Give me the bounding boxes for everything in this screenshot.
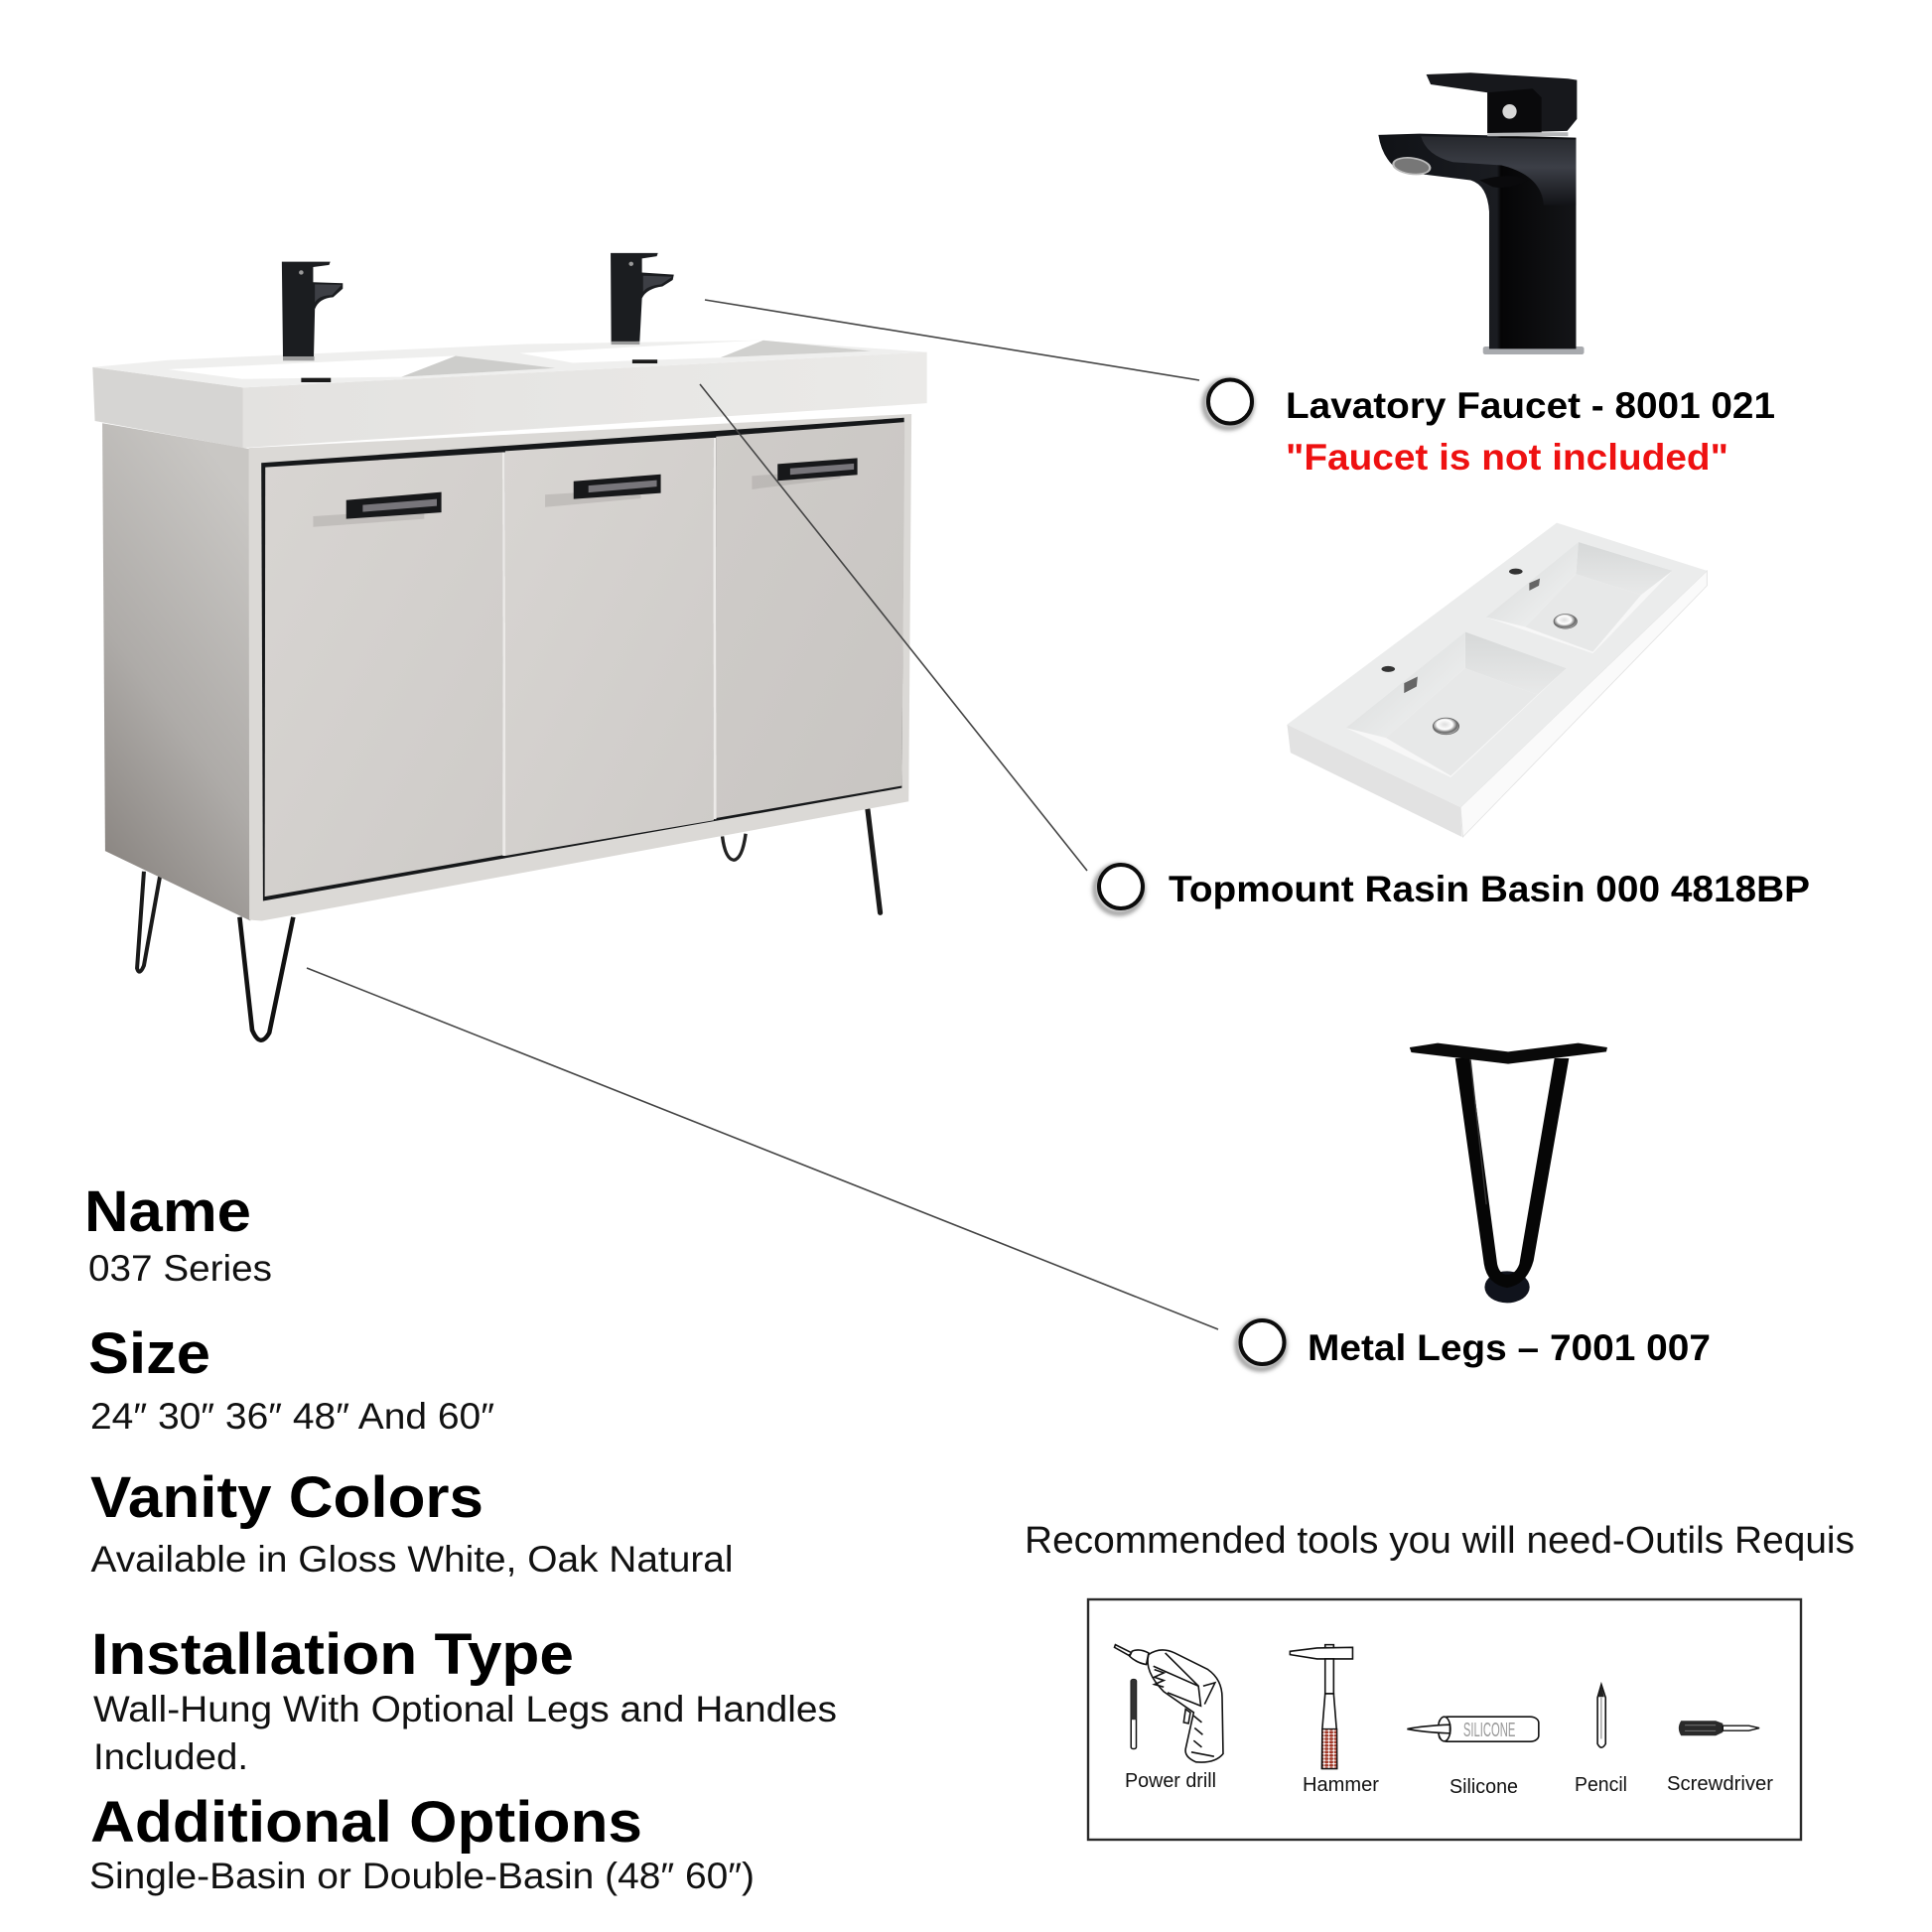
door seam right — [712, 438, 718, 819]
spec value: installation line two: Included. — [93, 1735, 248, 1777]
door left — [265, 452, 503, 897]
near bowl — [1346, 632, 1567, 777]
leader line: faucet — [705, 300, 1199, 380]
faucet body — [1378, 134, 1576, 348]
icon: hammer — [1290, 1645, 1352, 1768]
back right hairpin leg — [723, 834, 746, 860]
front left hairpin leg — [239, 917, 293, 1040]
far bowl — [1486, 542, 1672, 653]
back left hairpin leg — [137, 872, 160, 972]
leader line: basin — [700, 384, 1087, 871]
spout highlight — [1421, 136, 1576, 206]
right faucet — [611, 253, 674, 363]
spec value: colors: Available in Gloss White, Oak Natural — [91, 1538, 734, 1580]
hairpin leg product photo — [1410, 1043, 1607, 1303]
front right leg — [868, 809, 881, 912]
near tap hole — [1381, 666, 1395, 672]
tools border — [1088, 1599, 1801, 1840]
icon: silicone tube — [1407, 1717, 1539, 1741]
countertop left face — [92, 367, 243, 448]
basin right face — [1460, 571, 1707, 837]
countertop top surface — [92, 341, 927, 387]
callout marker: basin — [1095, 865, 1143, 913]
vanity cabinet illustration — [92, 253, 927, 1040]
icon: pencil — [1597, 1685, 1605, 1747]
cabinet side panel — [102, 423, 250, 921]
far overflow — [1529, 579, 1540, 591]
handle right — [752, 458, 858, 489]
aerator — [1391, 155, 1432, 177]
leg foot — [1484, 1271, 1530, 1303]
tool label: silicone: Silicone — [1449, 1775, 1518, 1798]
leader line: legs — [307, 968, 1218, 1329]
left basin opening — [168, 355, 555, 379]
callout label: basin: Topmount Rasin Basin 000 4818BP — [1169, 869, 1810, 909]
door centre — [505, 438, 714, 856]
leg mounting plate — [1410, 1043, 1607, 1064]
lever underside shadow — [1487, 88, 1542, 133]
spec heading: options: Additional Options — [90, 1790, 642, 1855]
spec value: size: 24″ 30″ 36″ 48″ And 60″ — [90, 1395, 494, 1437]
icon: screwdriver — [1679, 1721, 1759, 1735]
countertop front face — [243, 352, 927, 448]
cabinet front frame — [249, 414, 911, 921]
callout note: faucet not included: "Faucet is not included" — [1286, 437, 1728, 478]
callout marker: legs — [1237, 1320, 1285, 1369]
callout marker: faucet — [1204, 379, 1252, 428]
icon: silicone tube: SILICONE — [1463, 1719, 1515, 1741]
spec heading: installation: Installation Type — [91, 1622, 574, 1687]
spec heading: size: Size — [88, 1321, 210, 1386]
near drain — [1433, 718, 1459, 735]
door seam left — [501, 452, 506, 856]
chrome collar — [1487, 132, 1568, 136]
tools heading: Recommended tools you will need-Outils Requis — [1025, 1520, 1855, 1562]
left faucet — [282, 262, 343, 382]
door right — [716, 422, 904, 818]
faucet product photo — [1378, 72, 1585, 354]
basin front left face — [1287, 725, 1461, 837]
spec value: installation line one: Wall-Hung With Optional Legs and Handles — [93, 1688, 837, 1729]
dark door recess — [261, 418, 904, 901]
far drain — [1554, 615, 1577, 628]
faucet lever — [1427, 72, 1577, 133]
tools panel — [1088, 1599, 1801, 1840]
near overflow — [1404, 676, 1418, 693]
spec heading: name: Name — [84, 1179, 251, 1244]
far tap hole — [1509, 569, 1523, 575]
tool label: power drill: Power drill — [1125, 1769, 1216, 1792]
spout underside shadow — [1479, 176, 1528, 188]
thin inner rod — [1470, 1059, 1486, 1204]
callout label: legs: Metal Legs – 7001 007 — [1308, 1327, 1711, 1368]
spec heading: colors: Vanity Colors — [90, 1465, 483, 1530]
basin top surface — [1287, 523, 1707, 807]
tool label: pencil: Pencil — [1575, 1773, 1627, 1796]
spec value: name: 037 Series — [88, 1247, 272, 1289]
tool label: screwdriver: Screwdriver — [1667, 1772, 1773, 1795]
lever screw — [1502, 104, 1517, 119]
callout label: faucet: Lavatory Faucet - 8001 021 — [1286, 385, 1775, 426]
faucet base ring — [1483, 346, 1585, 354]
double basin product photo — [1287, 523, 1707, 837]
right basin opening — [520, 341, 872, 363]
tool label: hammer: Hammer — [1303, 1773, 1379, 1796]
icon: power drill — [1115, 1645, 1223, 1762]
leg rods — [1455, 1058, 1569, 1288]
spec value: options: Single-Basin or Double-Basin (48″ 60″) — [89, 1855, 755, 1896]
handle left — [313, 492, 442, 527]
handle centre — [545, 475, 661, 507]
